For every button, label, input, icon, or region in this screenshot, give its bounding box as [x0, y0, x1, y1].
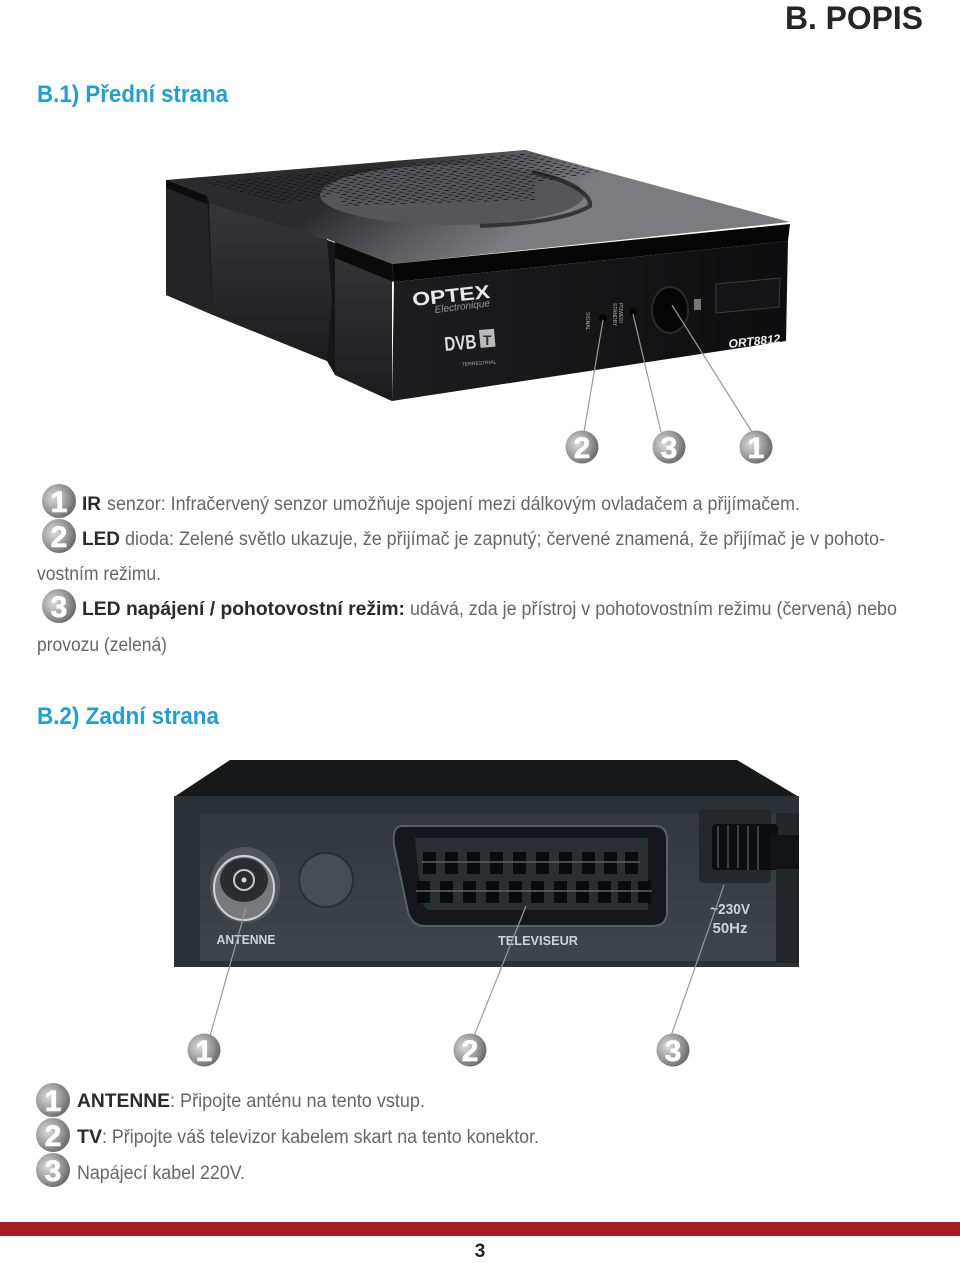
text block: front side descriptions: provozu (zelená) [37, 635, 167, 656]
text block: front side descriptions: senzor: Infračervený senzor umožňuje spojení mezi dálkovým ovladačem a přijímačem. [107, 494, 800, 515]
heading: rear side: B.2) Zadní strana [37, 703, 220, 730]
text block: front side descriptions: LED napájení / pohotovostní režim: [82, 599, 405, 620]
badge 2 rear [454, 1034, 486, 1068]
badge 1 [36, 1083, 70, 1118]
text block: rear side descriptions: : Připojte anténu na tento vstup. [170, 1091, 425, 1112]
text block: front side descriptions: dioda: Zelené světlo ukazuje, že přijímač je zapnutý; červené znamená, že přijímač je v pohoto- [125, 529, 885, 550]
device photo: front view: Electronique [434, 298, 491, 316]
device photo: front view: SIGNAL [584, 312, 590, 331]
device photo: rear view: ~230V [710, 901, 750, 918]
device photo: rear view: TELEVISEUR [498, 933, 579, 948]
badge 2 front: 2 [574, 432, 590, 465]
text block: front side descriptions: LED [82, 529, 120, 550]
badge 2 front [566, 430, 598, 465]
text block: rear side descriptions: TV [77, 1127, 102, 1148]
device photo: front view: STANDBY [611, 303, 617, 327]
text block: front side descriptions: udává, zda je přístroj v pohotovostním režimu (červená) nebo [410, 599, 897, 620]
badge 2 rear: 2 [462, 1035, 478, 1068]
badge 2 [42, 519, 76, 554]
badge 3: 3 [45, 1155, 61, 1188]
device photo: front view: ORT8812 [728, 332, 781, 351]
page title: B. POPIS [785, 0, 923, 36]
logo text: OPTEX [411, 282, 491, 311]
badge 1 [42, 484, 76, 519]
device photo: front view: T [483, 332, 492, 348]
badge 1: 1 [45, 1085, 61, 1118]
badge 2: 2 [51, 521, 67, 554]
text block: rear side descriptions [36, 1083, 539, 1188]
text block: front side descriptions: IR [82, 494, 101, 515]
footer bar [0, 1222, 960, 1236]
badge 3: 3 [51, 591, 67, 624]
text block: rear side descriptions: : Připojte váš televizor kabelem skart na tento konektor. [102, 1127, 539, 1148]
callout lines: front [584, 305, 752, 432]
badge 3 [42, 589, 76, 624]
heading: front side: B.1) Přední strana [37, 81, 229, 108]
text block: rear side descriptions: ANTENNE [77, 1091, 170, 1112]
badge 2 [36, 1118, 70, 1153]
device photo: rear view [174, 760, 799, 967]
power cable [699, 809, 799, 883]
badge 1 rear [188, 1034, 220, 1068]
badge 3 rear: 3 [665, 1035, 681, 1068]
page number: 3 [475, 1241, 485, 1262]
badge 1: 1 [51, 486, 67, 519]
device photo: rear view: 50Hz [712, 920, 748, 937]
badge 2: 2 [45, 1120, 61, 1153]
badge 1 front [740, 430, 772, 465]
badge 3 front [652, 430, 686, 465]
badge 3 front: 3 [661, 432, 677, 465]
scart socket [394, 826, 667, 926]
callout lines: rear [210, 885, 724, 1036]
device photo: front view: POWER/ [617, 303, 623, 324]
device photo: rear view: ANTENNE [216, 932, 276, 947]
badge 3 rear [656, 1034, 690, 1068]
device photo: front view [166, 148, 790, 401]
badge 3 [36, 1153, 70, 1188]
device photo: front view: TERRESTRIAL [462, 360, 497, 368]
badge 1 front: 1 [748, 432, 764, 465]
antenna connector [210, 847, 280, 923]
text block: front side descriptions [37, 484, 897, 656]
device photo: front view: DVB [444, 331, 477, 356]
badge 1 rear: 1 [196, 1035, 212, 1068]
text block: front side descriptions: vostním režimu. [37, 564, 161, 585]
text block: rear side descriptions: Napájecí kabel 220V. [77, 1163, 245, 1184]
